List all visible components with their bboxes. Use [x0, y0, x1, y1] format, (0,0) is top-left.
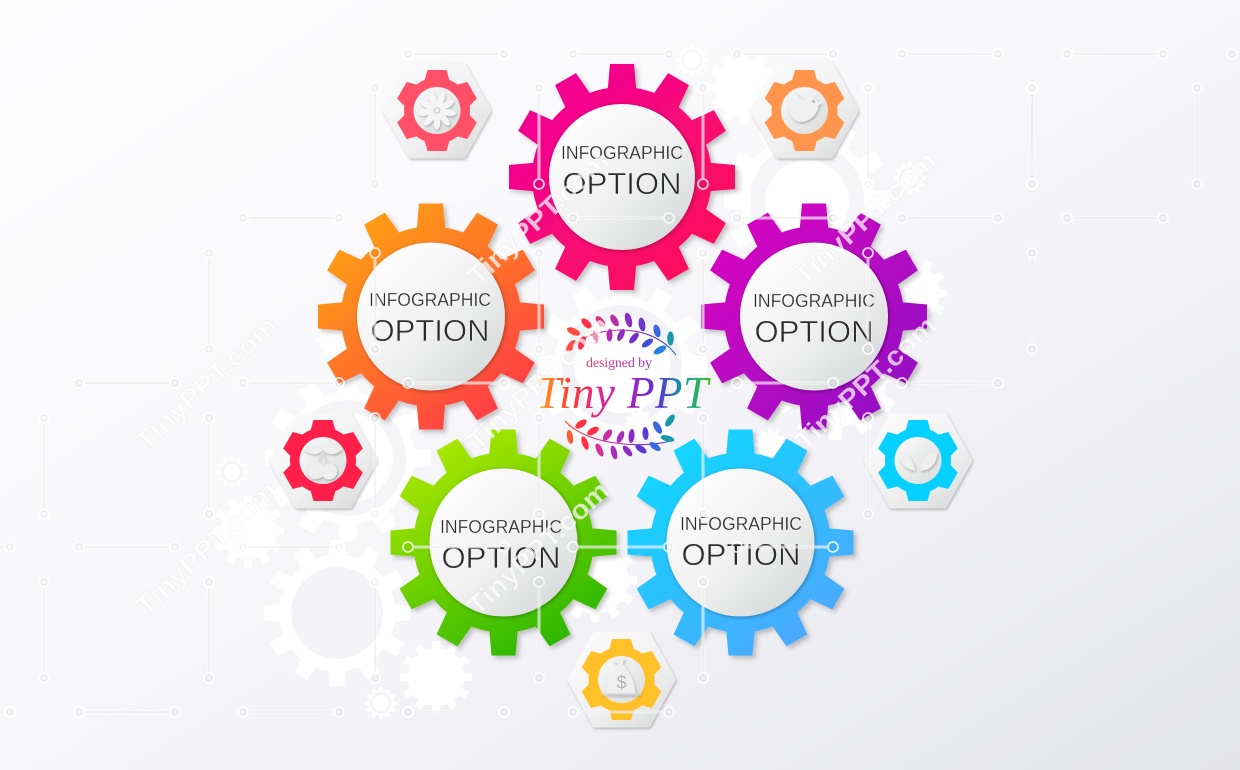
- watermark text: TinyPPT.com: [789, 310, 942, 456]
- watermark text: TinyPPT.com: [462, 145, 615, 291]
- heading: purple gear label: INFOGRAPHIC: [753, 291, 875, 311]
- gear: magenta: [507, 62, 737, 292]
- watermark text: TinyPPT.com: [462, 475, 615, 621]
- icon: flower hexagon: [387, 66, 487, 154]
- heading: blue gear label: [680, 514, 802, 572]
- icon: money bag hexagon: $: [616, 672, 627, 692]
- gear: purple: [699, 202, 929, 432]
- background white gears: [212, 44, 947, 719]
- heading: orange gear label: INFOGRAPHIC: [369, 290, 491, 310]
- gear: blue: [626, 428, 856, 658]
- gear: green: [388, 428, 618, 658]
- watermark text: TinyPPT.com: [789, 145, 942, 291]
- icon: bottom laurel: [565, 413, 677, 460]
- text: Tiny PPT: Tiny PPT: [536, 368, 711, 418]
- heading: orange gear label: [369, 290, 491, 348]
- watermark text: TinyPPT.com: [130, 475, 283, 621]
- watermark text: TinyPPT.com: [462, 310, 615, 456]
- icon: cherry hexagon: [273, 416, 373, 504]
- heading: blue gear label: OPTION: [682, 537, 800, 572]
- heading: green gear label: INFOGRAPHIC: [440, 517, 562, 537]
- heading: purple gear label: [753, 291, 875, 349]
- heading: green gear label: OPTION: [442, 540, 560, 575]
- icon: leaves hexagon: [868, 416, 968, 504]
- heading: orange gear label: OPTION: [370, 313, 490, 348]
- icon: money bag hexagon: [572, 636, 672, 724]
- heading: green gear label: [440, 517, 562, 575]
- watermark text: TinyPPT.com: [130, 310, 283, 456]
- heading: magenta gear label: OPTION: [562, 166, 682, 201]
- heading: purple gear label: OPTION: [754, 314, 874, 349]
- gear: orange: [316, 202, 546, 432]
- text: designed by: designed by: [586, 356, 652, 371]
- logo: TinyPPT: [536, 312, 711, 460]
- heading: blue gear label: INFOGRAPHIC: [680, 514, 802, 534]
- icon: top laurel: [564, 312, 676, 356]
- heading: magenta gear label: [561, 143, 683, 201]
- heading: magenta gear label: INFOGRAPHIC: [561, 143, 683, 163]
- watermark text: [130, 145, 942, 621]
- icon: bird hexagon: [754, 66, 854, 154]
